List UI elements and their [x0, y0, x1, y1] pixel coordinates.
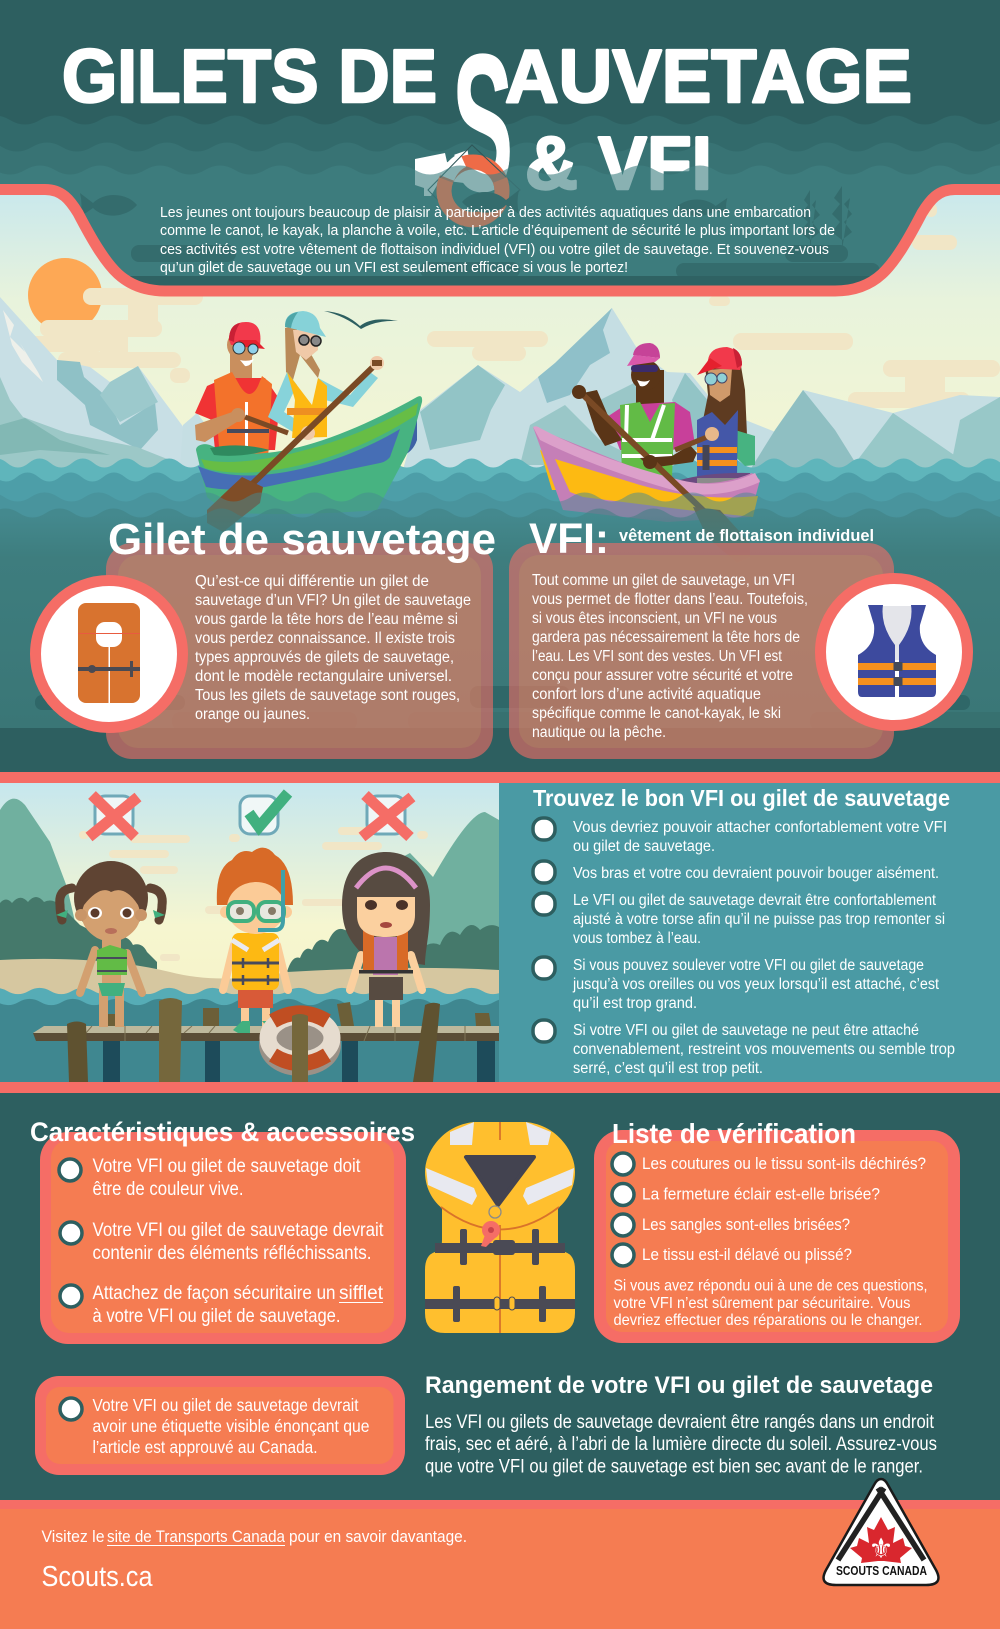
- kid: left, vest too small: [56, 861, 165, 1027]
- checkboxes: [59, 1159, 82, 1307]
- dock posts foreground: [67, 998, 440, 1082]
- paragraph: frais, sec et aéré, à l’abri de la lumière directe du soleil. Assurez-vous: [425, 1434, 937, 1455]
- paragraph: Les VFI ou gilets de sauvetage devraient être rangés dans un endroit: [425, 1412, 935, 1433]
- checklist questions: La fermeture éclair est-elle brisée?: [642, 1184, 880, 1204]
- checklist text: [572, 819, 955, 1077]
- text block: conçu pour assurer votre sécurité et votre: [532, 667, 793, 684]
- panel: Canadian approval label: Votre VFI ou gilet de sauvetage devrait: [92, 1395, 359, 1415]
- checklist questions: Le tissu est-il délavé ou plissé?: [642, 1245, 852, 1264]
- text block: Tous les gilets de sauvetage sont rouges,: [195, 687, 460, 704]
- storage text: [425, 1372, 937, 1478]
- kid: right, vest too big: [342, 852, 430, 1027]
- intro text: ces activités est votre vêtement de flottaison individuel (VFI) ou votre gilet de sauvetage. Et souvenez-vous: [160, 241, 829, 258]
- checklist advice: Si vous avez répondu oui à une de ces questions,: [614, 1278, 928, 1294]
- title: S: [452, 15, 513, 232]
- checkboxes: [533, 818, 555, 1042]
- canoe: right paddlers: [533, 343, 760, 563]
- life ring on dock post: [259, 1013, 341, 1082]
- intro text: [160, 204, 835, 276]
- man in green vest: [583, 343, 697, 477]
- checkboxes: [612, 1153, 634, 1266]
- footer link text: Visitez le: [42, 1528, 104, 1546]
- checklist questions: Les sangles sont-elles brisées?: [642, 1215, 850, 1234]
- footer: [0, 1500, 1000, 1629]
- text block: vous garde la tête hors de l’eau même si: [195, 611, 458, 628]
- fish, trees and logs silhouettes: [80, 186, 880, 279]
- feature text: être de couleur vive.: [92, 1179, 244, 1200]
- paragraph: [425, 1412, 937, 1478]
- kid: middle, correct vest: [217, 848, 293, 1033]
- checklist text: qu’il est trop grand.: [573, 995, 697, 1012]
- panel: Canadian approval label: avoir une étiquette visible énonçant que: [92, 1416, 370, 1436]
- text block: vous perdez connaissance. Il existe trois: [195, 630, 455, 647]
- panel: Canadian approval label: l’article est approuvé au Canada.: [92, 1437, 318, 1457]
- text block: Qu’est-ce qui différentie un gilet de: [195, 573, 429, 590]
- side and hull: [540, 450, 556, 490]
- clouds: [79, 827, 428, 961]
- logo: Scouts Canada: [824, 1479, 938, 1585]
- subheading: vêtement de flottaison individuel: [619, 527, 874, 545]
- checklist text: ajusté à votre torse afin qu’il ne puisse pas trop remonter si: [573, 911, 945, 928]
- panel: checklist: [594, 1118, 960, 1343]
- text block: [532, 572, 808, 741]
- icon: yellow life jacket with whistle: [425, 1122, 575, 1333]
- footer link text: site de Transports Canada: [107, 1528, 286, 1546]
- heading: Liste de vérification: [612, 1118, 856, 1149]
- mountains: [0, 297, 1000, 480]
- maple leaf: [850, 1517, 912, 1563]
- checklist text: Le VFI ou gilet de sauvetage devrait être confortablement: [573, 892, 937, 909]
- checklist text: ou gilet de sauvetage.: [573, 838, 715, 855]
- coral stripe: [0, 772, 1000, 783]
- text block: vous permet de flotter dans l’eau. Toutefois,: [532, 591, 808, 608]
- bird: [324, 311, 398, 329]
- heading: Rangement de votre VFI ou gilet de sauvetage: [425, 1372, 933, 1399]
- text block: confort lors d’une activité aquatique: [532, 686, 761, 703]
- paddle: [582, 394, 706, 508]
- hull banner: [0, 48, 1000, 286]
- heading: Gilet de sauvetage: [108, 515, 496, 564]
- heading: VFI:: [529, 515, 609, 563]
- text block: Tout comme un gilet de sauvetage, un VFI: [532, 572, 795, 589]
- footer link text: pour en savoir davantage.: [289, 1528, 467, 1546]
- feature text: Attachez de façon sécuritaire un: [92, 1283, 336, 1304]
- paddle: [248, 365, 375, 488]
- feature text: à votre VFI ou gilet de sauvetage.: [92, 1306, 340, 1327]
- panel: find the right PFD: [499, 783, 1000, 1082]
- checklist text: Vous devriez pouvoir attacher confortablement votre VFI: [573, 819, 947, 836]
- title: [62, 15, 912, 232]
- title: GILETS DE: [62, 34, 437, 118]
- hills: [0, 798, 499, 945]
- website: Scouts.ca: [42, 1561, 153, 1593]
- scene: three kids on a dock: [0, 783, 499, 1082]
- text block: dont le modèle rectangulaire universel.: [195, 668, 452, 685]
- log silhouettes: [35, 686, 970, 710]
- text block: l’eau. Les VFI sont des vestes. Un VFI est: [532, 648, 783, 665]
- intro text: comme le canot, le kayak, la planche à voile, etc. L’article d’équipement de sécurité le plus important lors de: [160, 222, 835, 239]
- submerged ring: [444, 180, 502, 220]
- text block: spécifique comme le canot-kayak, le ski: [532, 705, 781, 722]
- check badge: right: [240, 793, 288, 834]
- feature text: Votre VFI ou gilet de sauvetage devrait: [92, 1220, 384, 1241]
- check badge: wrong: [89, 795, 138, 837]
- heading: Trouvez le bon VFI ou gilet de sauvetage: [533, 785, 950, 811]
- checklist advice: [614, 1278, 928, 1329]
- checklist text: convenablement, restreint vos mouvements ou semble trop: [573, 1041, 955, 1058]
- dark section background: [0, 1093, 1000, 1501]
- feature text: Votre VFI ou gilet de sauvetage doit: [92, 1156, 361, 1177]
- woman in yellow vest: [268, 311, 378, 440]
- paragraph: que votre VFI ou gilet de sauvetage est bien sec avant de le ranger.: [425, 1456, 923, 1478]
- woman in blue vest: [675, 347, 755, 478]
- intro text: Les jeunes ont toujours beaucoup de plaisir à participer à des activités aquatiques dans une embarcation: [160, 204, 811, 221]
- title: AUVETAGE: [505, 34, 912, 118]
- checklist text: vous tombez à l’eau.: [573, 930, 701, 947]
- icon: life ring: [428, 145, 520, 235]
- checklist text: Vos bras et votre cou devraient pouvoir bouger aisément.: [573, 865, 939, 882]
- panel: VFI: [509, 515, 968, 759]
- panel: gilet de sauvetage: [36, 515, 496, 759]
- text block: orange ou jaunes.: [195, 706, 310, 723]
- title: & VFI: [525, 121, 712, 205]
- logo: Scouts Canada: SCOUTS CANADA: [836, 1563, 927, 1578]
- heading: Caractéristiques & accessoires: [30, 1117, 415, 1147]
- checklist text: Si vous pouvez soulever votre VFI ou gilet de sauvetage: [573, 957, 924, 974]
- coral stripe: [0, 1082, 1000, 1093]
- icon: hook end of the S: [415, 153, 463, 196]
- icon: blue life vest: [820, 578, 968, 726]
- text block: si vous êtes inconscient, un VFI ne vous: [532, 610, 777, 627]
- sun: [28, 258, 102, 332]
- check badge: wrong: [362, 795, 412, 837]
- logo: Scouts Canada: ⚜: [868, 1532, 894, 1565]
- banner coral border: [0, 190, 1000, 291]
- feature text: [92, 1156, 384, 1327]
- footer link text: [42, 1528, 467, 1546]
- water layers and canoes: [0, 311, 1000, 728]
- sky background: [0, 180, 1000, 480]
- dock: [33, 1002, 499, 1082]
- checklist questions: [642, 1154, 926, 1264]
- text block: nautique ou la pêche.: [532, 724, 666, 741]
- feature text: sifflet: [339, 1283, 384, 1304]
- text block: types approuvés de gilets de sauvetage,: [195, 649, 454, 666]
- panel: Canadian approval label: [35, 1376, 405, 1475]
- checklist questions: Les coutures ou le tissu sont-ils déchirés?: [642, 1154, 926, 1173]
- checklist advice: votre VFI n’est sûrement par sécuritaire. Vous: [614, 1295, 910, 1312]
- text block: sauvetage d’un VFI? Un gilet de sauvetage: [195, 592, 471, 609]
- checklist advice: devriez effectuer des réparations ou le changer.: [614, 1312, 922, 1329]
- water: [0, 988, 499, 1006]
- clouds: [20, 203, 1000, 408]
- feature text: contenir des éléments réfléchissants.: [92, 1243, 372, 1264]
- checklist text: jusqu’à vos oreilles ou vos yeux lorsqu’il est attaché, c’est: [572, 976, 940, 993]
- intro text: qu’un gilet de sauvetage ou un VFI est seulement efficace si vous le portez!: [160, 259, 628, 276]
- panel: features and accessories: [30, 1117, 415, 1344]
- beach: [0, 958, 499, 994]
- checklist text: Si votre VFI ou gilet de sauvetage ne peut être attaché: [573, 1022, 919, 1039]
- checklist text: serré, c’est qu’il est trop petit.: [573, 1060, 763, 1077]
- man in orange vest: [195, 322, 288, 460]
- icon: orange rectangular life jacket: [36, 580, 182, 728]
- text block: gardera pas nécessairement la tête hors de: [532, 629, 800, 646]
- text block: [195, 573, 471, 723]
- hull: [196, 396, 422, 514]
- stern: [407, 420, 417, 454]
- canoe: left paddlers: [195, 311, 422, 532]
